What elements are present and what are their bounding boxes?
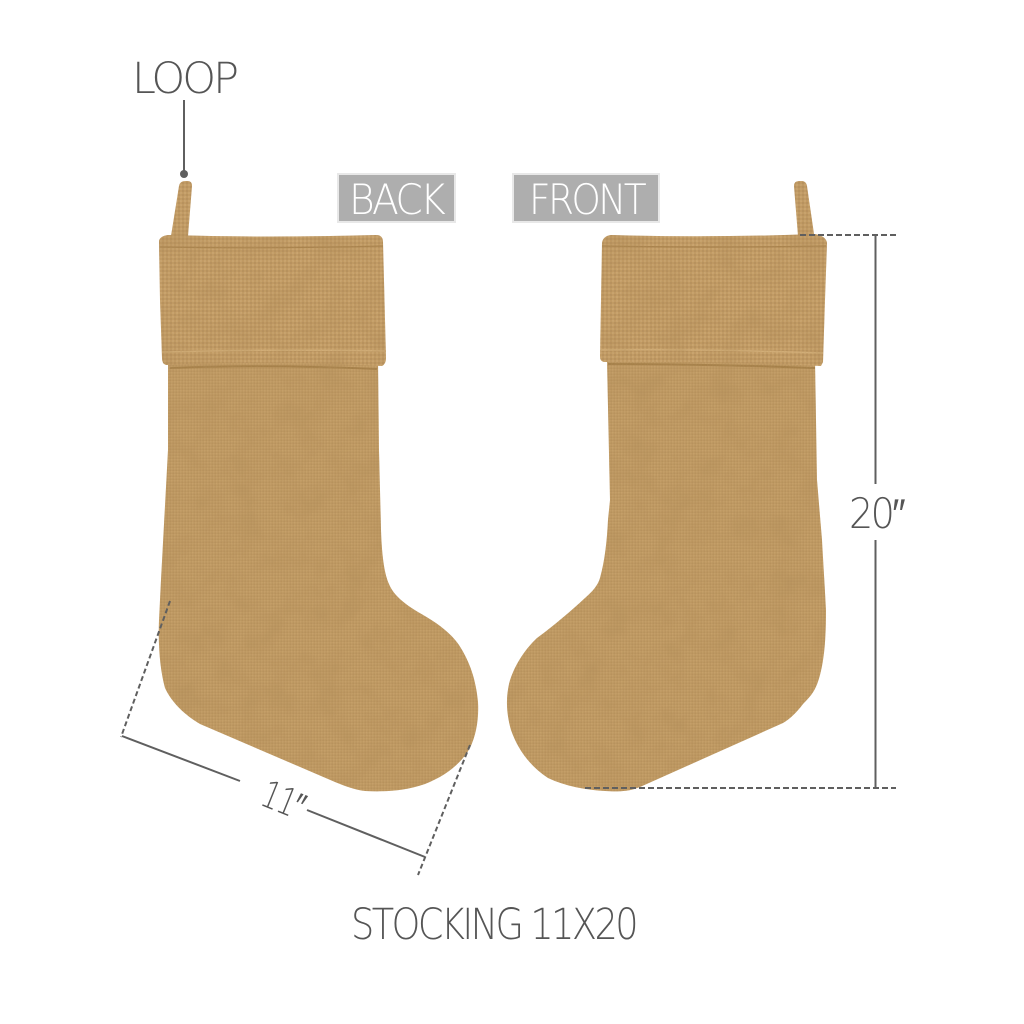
loop callout pointer	[180, 100, 188, 178]
front cuff top seam	[602, 246, 826, 247]
product title: STOCKING 11X20	[351, 900, 636, 950]
front stocking	[507, 181, 827, 791]
width label: 11″	[255, 772, 312, 829]
front stocking loop	[794, 181, 814, 236]
back stocking cuff	[159, 235, 386, 366]
front stocking body	[507, 360, 826, 791]
front stocking cuff	[600, 234, 827, 366]
back cuff shadow	[170, 366, 377, 369]
back cuff top seam	[160, 246, 383, 248]
back label: BACK	[349, 175, 446, 224]
back stocking loop	[171, 181, 192, 236]
loop callout label: LOOP	[132, 54, 237, 104]
back stocking	[159, 181, 478, 791]
front cuff fold	[601, 350, 823, 353]
back stocking body	[159, 360, 478, 791]
back cuff fold	[162, 350, 386, 352]
height dimension lines	[585, 235, 896, 788]
height label: 20″	[849, 489, 906, 538]
front label: FRONT	[529, 175, 646, 224]
front cuff shadow	[608, 364, 815, 368]
width dimension lines	[121, 601, 470, 875]
